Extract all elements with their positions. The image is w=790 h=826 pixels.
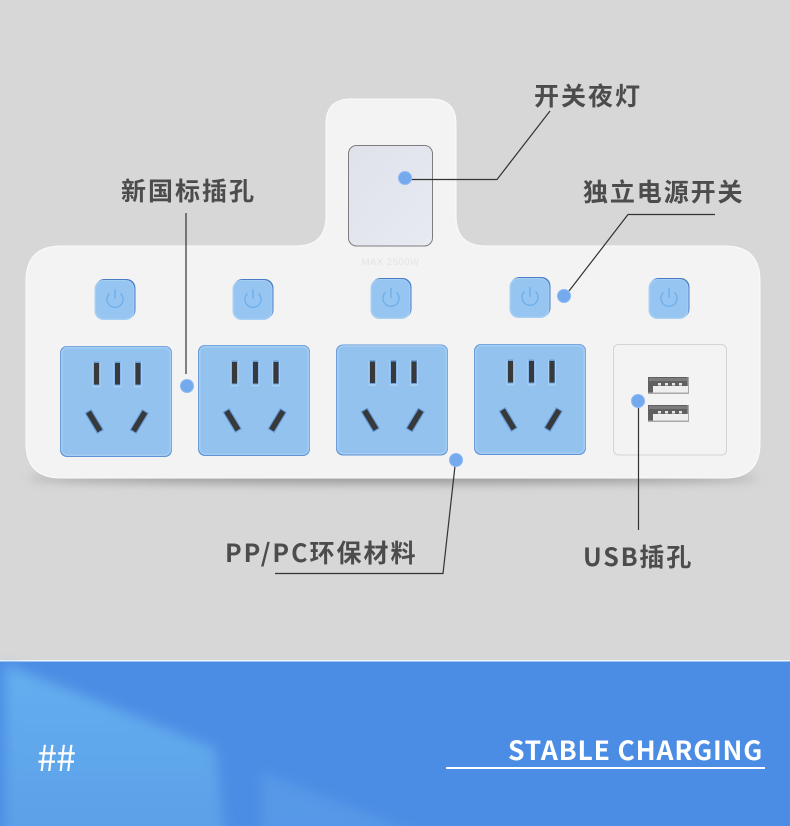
callout: night light switch bbox=[398, 77, 642, 184]
light shape left bbox=[5, 665, 225, 826]
callout: USB ports bbox=[583, 394, 693, 574]
background bbox=[0, 0, 790, 660]
light shape right bbox=[262, 772, 420, 826]
USB port top bbox=[648, 377, 689, 394]
band separator bbox=[0, 660, 790, 662]
rating text: MAX 2500W bbox=[362, 257, 419, 268]
switch 4 bbox=[510, 277, 550, 318]
socket 2 bbox=[198, 345, 310, 456]
product shadow bbox=[28, 473, 758, 483]
callout: independent power switch bbox=[558, 173, 744, 302]
callout: PP/PC material bbox=[225, 454, 462, 574]
title underline bbox=[446, 767, 765, 769]
hash marks: ## bbox=[37, 730, 75, 782]
strip body bbox=[26, 99, 760, 478]
section title: STABLE CHARGING bbox=[508, 729, 763, 768]
switch 2 bbox=[232, 279, 274, 320]
band fill bbox=[0, 662, 790, 826]
callout: new standard sockets: 新国标插孔 bbox=[121, 172, 256, 208]
callout: independent power switch: 独立电源开关 bbox=[583, 173, 744, 209]
footer band bbox=[0, 660, 790, 826]
socket 3 bbox=[336, 344, 448, 456]
switch 1 bbox=[94, 279, 136, 320]
night light panel bbox=[348, 146, 432, 246]
socket 4 bbox=[474, 344, 586, 455]
USB port bottom bbox=[648, 405, 689, 422]
callout: night light switch: 开关夜灯 bbox=[534, 77, 642, 113]
callout: PP/PC material: PP/PC环保材料 bbox=[225, 534, 417, 570]
USB panel bbox=[614, 344, 726, 455]
callout: USB ports: USB插孔 bbox=[583, 538, 693, 574]
switch 3 bbox=[370, 278, 412, 319]
socket 1 bbox=[60, 346, 172, 457]
switch 5 bbox=[648, 278, 690, 319]
power strip bbox=[26, 99, 760, 483]
callout: new standard sockets bbox=[121, 172, 256, 392]
